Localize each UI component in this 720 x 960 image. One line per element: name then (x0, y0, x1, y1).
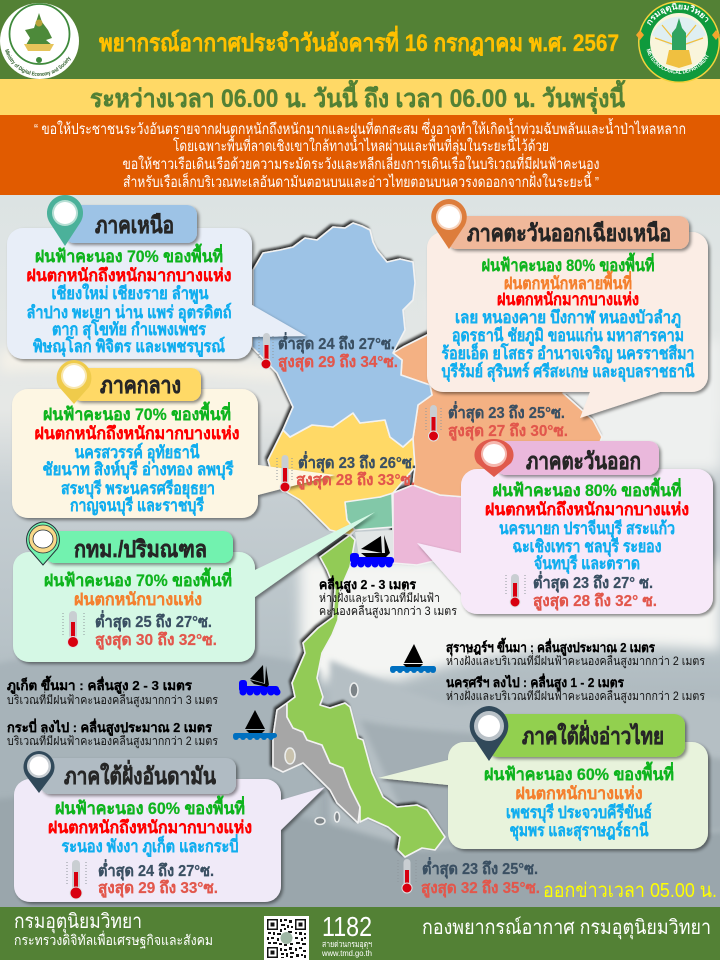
temperature: central: ต่ำสุด 23 ถึง 26°ซ. (298, 451, 416, 473)
temperature: east: สูงสุด 28 ถึง 32° ซ. (533, 592, 657, 612)
callout body (14, 779, 325, 902)
warning text (34, 118, 686, 191)
hotline: www.tmd.go.th (321, 949, 372, 958)
map region: north (252, 223, 432, 447)
panel: northeast (427, 199, 708, 418)
forecast text: ลำปาง พะเยา น่าน แพร่ อุตรดิตถ์ (26, 302, 232, 323)
icon: map pin (27, 522, 59, 565)
map region: central (268, 413, 415, 535)
temperature: Andaman: สูงสุด 29 ถึง 33°ซ. (98, 879, 218, 899)
heading pill (496, 441, 659, 475)
forecast text: พิษณุโลก พิจิตร และเพชรบูรณ์ (33, 336, 225, 358)
temperature: northeast (426, 401, 568, 442)
forecast text: นครนายก ปราจีนบุรี สระแก้ว (499, 518, 675, 539)
callout body (427, 232, 708, 418)
temperature: central: สูงสุด 28 ถึง 33°ซ. (296, 471, 415, 491)
forecast text: สระบุรี พระนครศรีอยุธยา (61, 478, 215, 499)
forecast text: ฉะเชิงเทรา ชลบุรี ระยอง (512, 536, 662, 557)
temperature: east: ต่ำสุด 23 ถึง 27° ซ. (533, 571, 653, 593)
icon: boat (390, 644, 436, 673)
panel: central (12, 360, 335, 518)
wave notice: Surat Thani and Nakhon Si Thammarat: สุราษฎร์ฯ ขึ้นมา : คลื่นสูงประมาณ 2 เมตร (446, 637, 655, 656)
warning text: โดยเฉพาะพื้นที่ลาดเชิงเขาใกล้ทางน้ำไหลผ่านและพื้นที่ลุ่มในระยะนี้ไว้ด้วย (173, 135, 549, 156)
panel: north (7, 195, 306, 359)
hotline: สายด่วนกรมอุตุฯ (322, 939, 372, 950)
temperature: north: สูงสุด 29 ถึง 34°ซ. (278, 353, 398, 373)
forecast text: ฝนตกหนักมากบางแห่ง (497, 290, 639, 309)
forecast text: ฝนฟ้าคะนอง 70% ของพื้นที่ (44, 567, 232, 590)
heading pill (487, 714, 685, 757)
warning text: ขอให้ชาวเรือเดินเรือด้วยความระมัดระวังและหลีกเลี่ยงการเดินเรือในบริเวณที่มีฝนฟ้าคะนอง (122, 153, 600, 173)
icon: boat (233, 710, 277, 740)
footer: department name: กระทรวงดิจิทัลเพื่อเศรษฐกิจและสังคม (14, 931, 213, 949)
forecast text (484, 761, 674, 841)
warning text: สำหรับเรือเล็กบริเวณทะเลอันดามันตอนบนและอ่าวไทยตอนบนควรงดออกจากฝั่งในระยะนี้ ” (123, 171, 599, 191)
icon: map pin (470, 706, 508, 761)
callout body (12, 389, 335, 518)
temperature: east (506, 571, 657, 612)
forecast text: ชุมพร และสุราษฎร์ธานี (510, 820, 649, 841)
forecast text: เพชรบุรี ประจวบคีรีขันธ์ (506, 802, 652, 823)
heading: กทม./ปริมณฑล (74, 536, 207, 562)
callout body (13, 512, 375, 662)
temperature: south: สูงสุด 32 ถึง 35°ซ. (421, 879, 540, 899)
forecast text: ฝนตกหนักบางแห่ง (516, 784, 642, 803)
forecast text: ฝนฟ้าคะนอง 60% ของพื้นที่ (484, 761, 674, 784)
forecast text: ฝนตกหนักหลายพื้นที่ (504, 270, 632, 293)
forecast text: ฝนตกหนักถึงหนักมากบางแห่ง (26, 266, 232, 285)
icon: QR code (264, 916, 309, 960)
hotline (321, 911, 372, 958)
logo: Meteorological Department: กรมอุตุนิยมวิทยา (647, 2, 708, 26)
temperature: Bangkok: ต่ำสุด 25 ถึง 27°ซ. (95, 610, 212, 632)
temperature: Bangkok (63, 610, 217, 651)
wave notice: Krabi (7, 710, 277, 749)
logo: Ministry of Digital Economy and Society (0, 3, 79, 79)
forecast text: ฝนฟ้าคะนอง 80% ของพื้นที่ (492, 477, 682, 500)
heading pill (45, 531, 233, 563)
heading pill (40, 758, 236, 794)
temperature: Andaman: ต่ำสุด 24 ถึง 27°ซ. (98, 859, 214, 881)
forecast text: ฝนฟ้าคะนอง 80% ของพื้นที่ (482, 252, 654, 275)
forecast text: ฝนฟ้าคะนอง 60% ของพื้นที่ (55, 795, 245, 818)
icon: map pin (23, 751, 55, 793)
map: islands (285, 683, 358, 824)
panel: Bangkok and vicinity (13, 512, 375, 662)
wave notice: upper gulf: คลื่นสูง 2 - 3 เมตร (319, 575, 416, 593)
wave notice: upper gulf: ห่างฝั่งและบริเวณที่มีฝนฟ้า (319, 589, 440, 605)
temperature: northeast: สูงสุด 27 ถึง 30°ซ. (448, 422, 568, 442)
footer: department name: กรมอุตุนิยมวิทยา (14, 911, 142, 934)
forecast text: นครสวรรค์ อุทัยธานี (74, 442, 200, 463)
forecast text: ฝนตกหนักถึงหนักมากบางแห่ง (485, 500, 689, 519)
temperature: Bangkok: สูงสุด 30 ถึง 32°ซ. (95, 631, 217, 651)
heading pill (64, 205, 197, 243)
hotline: 1182 (322, 911, 372, 942)
icon: map pin (57, 360, 91, 404)
heading: ภาคตะวันออกเฉียงเหนือ (467, 220, 671, 246)
footer band (0, 907, 720, 960)
wave notice: Surat Thani and Nakhon Si Thammarat (390, 637, 705, 704)
header band (0, 0, 720, 79)
map of Thailand (252, 223, 602, 857)
temperature: central (277, 451, 416, 492)
icon: boat (239, 665, 280, 696)
footer: department name (14, 911, 213, 949)
forecast text (48, 795, 252, 858)
temperature: north: ต่ำสุด 24 ถึง 27°ซ. (278, 332, 395, 354)
wave notice: upper gulf (319, 535, 457, 619)
heading pill (72, 368, 201, 401)
map region: northeast (393, 300, 602, 520)
warning band (0, 115, 720, 195)
forecast text: ฝนตกหนักถึงหนักมากบางแห่ง (48, 818, 252, 837)
map region: east (393, 485, 530, 565)
forecast text: เลย หนองคาย บึงกาฬ หนองบัวลำภู (455, 308, 681, 329)
map region: south (287, 535, 445, 857)
forecast text: กาญจนบุรี และราชบุรี (70, 495, 205, 516)
wave notice: Krabi: กระบี่ ลงไป : คลื่นสูงประมาณ 2 เมตร (7, 718, 212, 736)
wave notice: upper gulf: คะนองคลื่นสูงมากกว่า 3 เมตร (319, 602, 457, 619)
wave notice: Phuket: ภูเก็ต ขึ้นมา : คลื่นสูง 2 - 3 เมตร (7, 675, 192, 694)
background: misty mountains (0, 195, 720, 920)
temperature: south: ต่ำสุด 23 ถึง 25°ซ. (422, 857, 538, 879)
logo: Meteorological Department: METEOROLOGICAL DEPARTMENT (646, 48, 709, 74)
icon: map pin (431, 199, 467, 249)
wave notice: Krabi: บริเวณที่มีฝนฟ้าคะนองคลื่นสูงมากกว่า 2 เมตร (7, 732, 218, 749)
forecast text: ชัยนาท สิงห์บุรี อ่างทอง ลพบุรี (42, 459, 234, 480)
temperature: north (259, 332, 398, 373)
icon: map pin (47, 195, 83, 246)
panel: south Gulf coast (378, 706, 708, 849)
forecast text (485, 477, 689, 574)
map: gulf of Thailand inset (355, 530, 393, 563)
map region: Andaman coast (273, 703, 360, 823)
forecast text: ฝนตกหนักถึงหนักมากบางแห่ง (34, 424, 240, 443)
title: พยากรณ์อากาศประจำวันอังคารที่ 16 กรกฎาคม พ.ศ. 2567 (99, 25, 619, 57)
panel: south Andaman coast (14, 751, 325, 902)
heading pill (447, 216, 689, 249)
heading: ภาคเหนือ (95, 212, 174, 238)
wave notice: Phuket: บริเวณที่มีฝนฟ้าคะนองคลื่นสูงมากกว่า 3 เมตร (7, 691, 218, 708)
forecast text: ระนอง พังงา ภูเก็ต และกระบี่ (62, 834, 238, 858)
forecast text: จันทบุรี และตราด (534, 553, 640, 574)
forecast text (34, 401, 240, 516)
forecast text: ตาก สุโขทัย กำแพงเพชร (52, 319, 207, 340)
temperature: Andaman (67, 859, 218, 899)
map region: Bangkok and vicinity (345, 493, 393, 530)
forecast text (44, 567, 232, 609)
forecast text (26, 243, 232, 358)
temperature: northeast: ต่ำสุด 23 ถึง 25°ซ. (448, 401, 565, 423)
temperature: south (398, 857, 540, 899)
subtitle: ระหว่างเวลา 06.00 น. วันนี้ ถึง เวลา 06.00 น. วันพรุ่งนี้ (90, 79, 626, 115)
callout body (7, 228, 306, 359)
wave notice: Surat Thani and Nakhon Si Thammarat: นครศรีฯ ลงไป : คลื่นสูง 1 - 2 เมตร (446, 673, 624, 691)
forecast text (442, 252, 695, 382)
icon: map pin (474, 439, 514, 477)
date band (0, 79, 720, 115)
callout body (417, 469, 713, 614)
forecast text: ฝนตกหนักบางแห่ง (74, 590, 202, 609)
forecast text: ฝนฟ้าคะนอง 70% ของพื้นที่ (35, 243, 223, 266)
heading: ภาคใต้ฝั่งอันดามัน (64, 759, 216, 789)
callout body (378, 742, 708, 849)
panel: east (417, 439, 713, 614)
heading: ภาคตะวันออก (526, 448, 641, 474)
forecast text: เชียงใหม่ เชียงราย ลำพูน (52, 283, 209, 305)
wave notice: Phuket (7, 665, 280, 708)
logo: Ministry of Digital Economy and Society: Ministry of Digital Economy and Society (5, 49, 71, 76)
heading: ภาคกลาง (100, 372, 181, 398)
logo: Meteorological Department (636, 1, 720, 83)
icon: boat (350, 535, 394, 568)
forecast text: ฝนฟ้าคะนอง 70% ของพื้นที่ (43, 401, 231, 424)
heading: ภาคใต้ฝั่งอ่าวไทย (522, 719, 664, 749)
